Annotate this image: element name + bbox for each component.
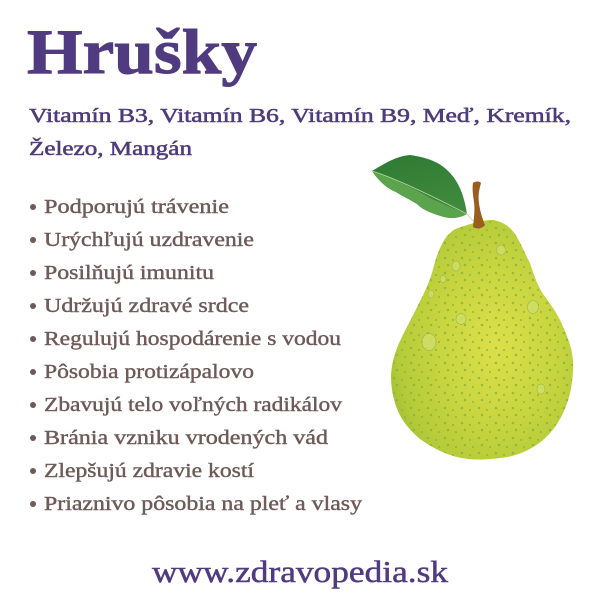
nutrients list: Vitamín B3, Vitamín B6, Vitamín B9, Meď, Kremík,: [29, 105, 571, 127]
benefits list: Zbavujú telo voľných radikálov: [44, 395, 342, 416]
leaf: [372, 155, 473, 221]
benefits list: [30, 197, 362, 515]
nutrients list: Železo, Mangán: [29, 137, 192, 160]
benefits list: Urýchľujú uzdravenie: [44, 230, 254, 251]
pear body: [391, 220, 573, 460]
water droplets: [422, 245, 545, 394]
benefits list: Priaznivo pôsobia na pleť a vlasy: [44, 494, 362, 515]
title: Hrušky: [27, 17, 257, 87]
pear illustration: [372, 155, 573, 460]
benefits list: Posilňujú imunitu: [44, 263, 214, 284]
stem: [473, 182, 485, 228]
benefits list: Podporujú trávenie: [44, 197, 229, 218]
benefits list: Udržujú zdravé srdce: [44, 296, 249, 317]
nutrients list: [29, 105, 571, 160]
benefits list: Zlepšujú zdravie kostí: [44, 461, 255, 482]
benefits list: Pôsobia protizápalovo: [44, 362, 254, 383]
benefits list: Bránia vzniku vrodených vád: [44, 428, 328, 449]
benefits list: Regulujú hospodárenie s vodou: [44, 329, 341, 350]
website footer: www.zdravopedia.sk: [152, 554, 449, 589]
